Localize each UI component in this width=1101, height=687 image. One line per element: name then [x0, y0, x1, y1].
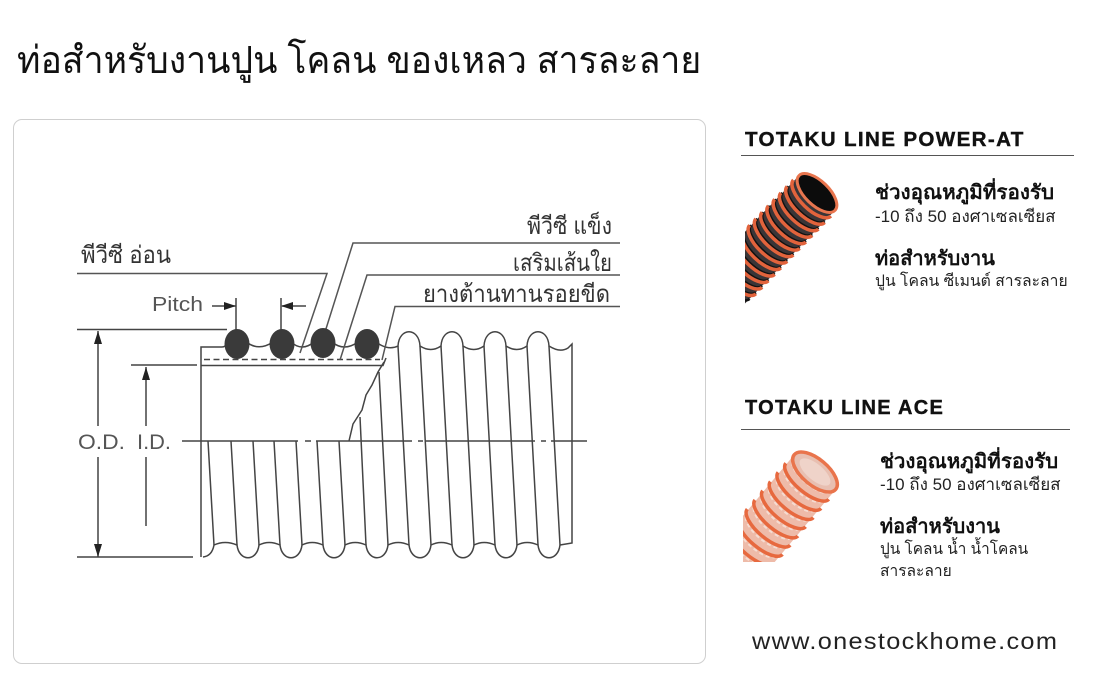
dimension lines	[77, 298, 306, 557]
reinforcement cord cross-sections	[224, 328, 380, 359]
spec text: ACE	[880, 447, 1061, 580]
title: ท่อสำหรับงานปูน โคลน ของเหลว สารละลาย	[17, 40, 701, 82]
temperature value: -10 ถึง 50 องศาเซลเซียส	[875, 207, 1056, 226]
spec text: Power-AT	[875, 178, 1068, 290]
temperature value: -10 ถึง 50 องศาเซลเซียส	[880, 475, 1061, 494]
inner wall lines	[201, 358, 386, 366]
divider: Power-AT	[741, 155, 1074, 156]
application heading: ท่อสำหรับงาน	[880, 516, 1000, 538]
product heading: ACE: TOTAKU LINE ACE	[745, 397, 944, 419]
centre line	[182, 440, 587, 442]
torn cutaway edge	[349, 362, 384, 441]
panel: hose cross-section diagram	[13, 119, 706, 664]
diagram	[77, 172, 840, 562]
diagram labels: เสริมเส้นใย	[513, 249, 612, 277]
application value: ปูน โคลน ซีเมนต์ สารละลาย	[875, 273, 1068, 290]
dimension arrowheads	[94, 302, 293, 557]
application heading: ท่อสำหรับงาน	[875, 248, 995, 270]
diagram labels: O.D.	[78, 431, 125, 454]
product photo: Power-AT hose	[745, 172, 838, 304]
temperature heading: ช่วงอุณหภูมิที่รองรับ	[880, 451, 1058, 473]
diagram labels: พีวีซี อ่อน	[81, 242, 171, 269]
diagram labels: I.D.	[137, 431, 171, 454]
product heading: Power-AT: TOTAKU LINE POWER-AT	[745, 129, 1025, 151]
divider: ACE	[741, 429, 1070, 430]
website url: www.onestockhome.com	[752, 628, 1058, 654]
application value: ปูน โคลน น้ำ น้ำโคลน	[880, 541, 1028, 558]
diagram labels: ยางต้านทานรอยขีด	[423, 281, 610, 308]
product photo: ACE hose	[743, 450, 840, 562]
hose ribs	[208, 346, 560, 545]
leader lines	[77, 243, 620, 360]
application value line two: สารละลาย	[880, 563, 952, 580]
diagram labels: Pitch	[152, 294, 203, 316]
temperature heading: ช่วงอุณหภูมิที่รองรับ	[875, 182, 1054, 204]
diagram labels	[78, 211, 612, 454]
diagram labels: พีวีซี แข็ง	[527, 211, 612, 240]
hose outline	[201, 332, 572, 558]
